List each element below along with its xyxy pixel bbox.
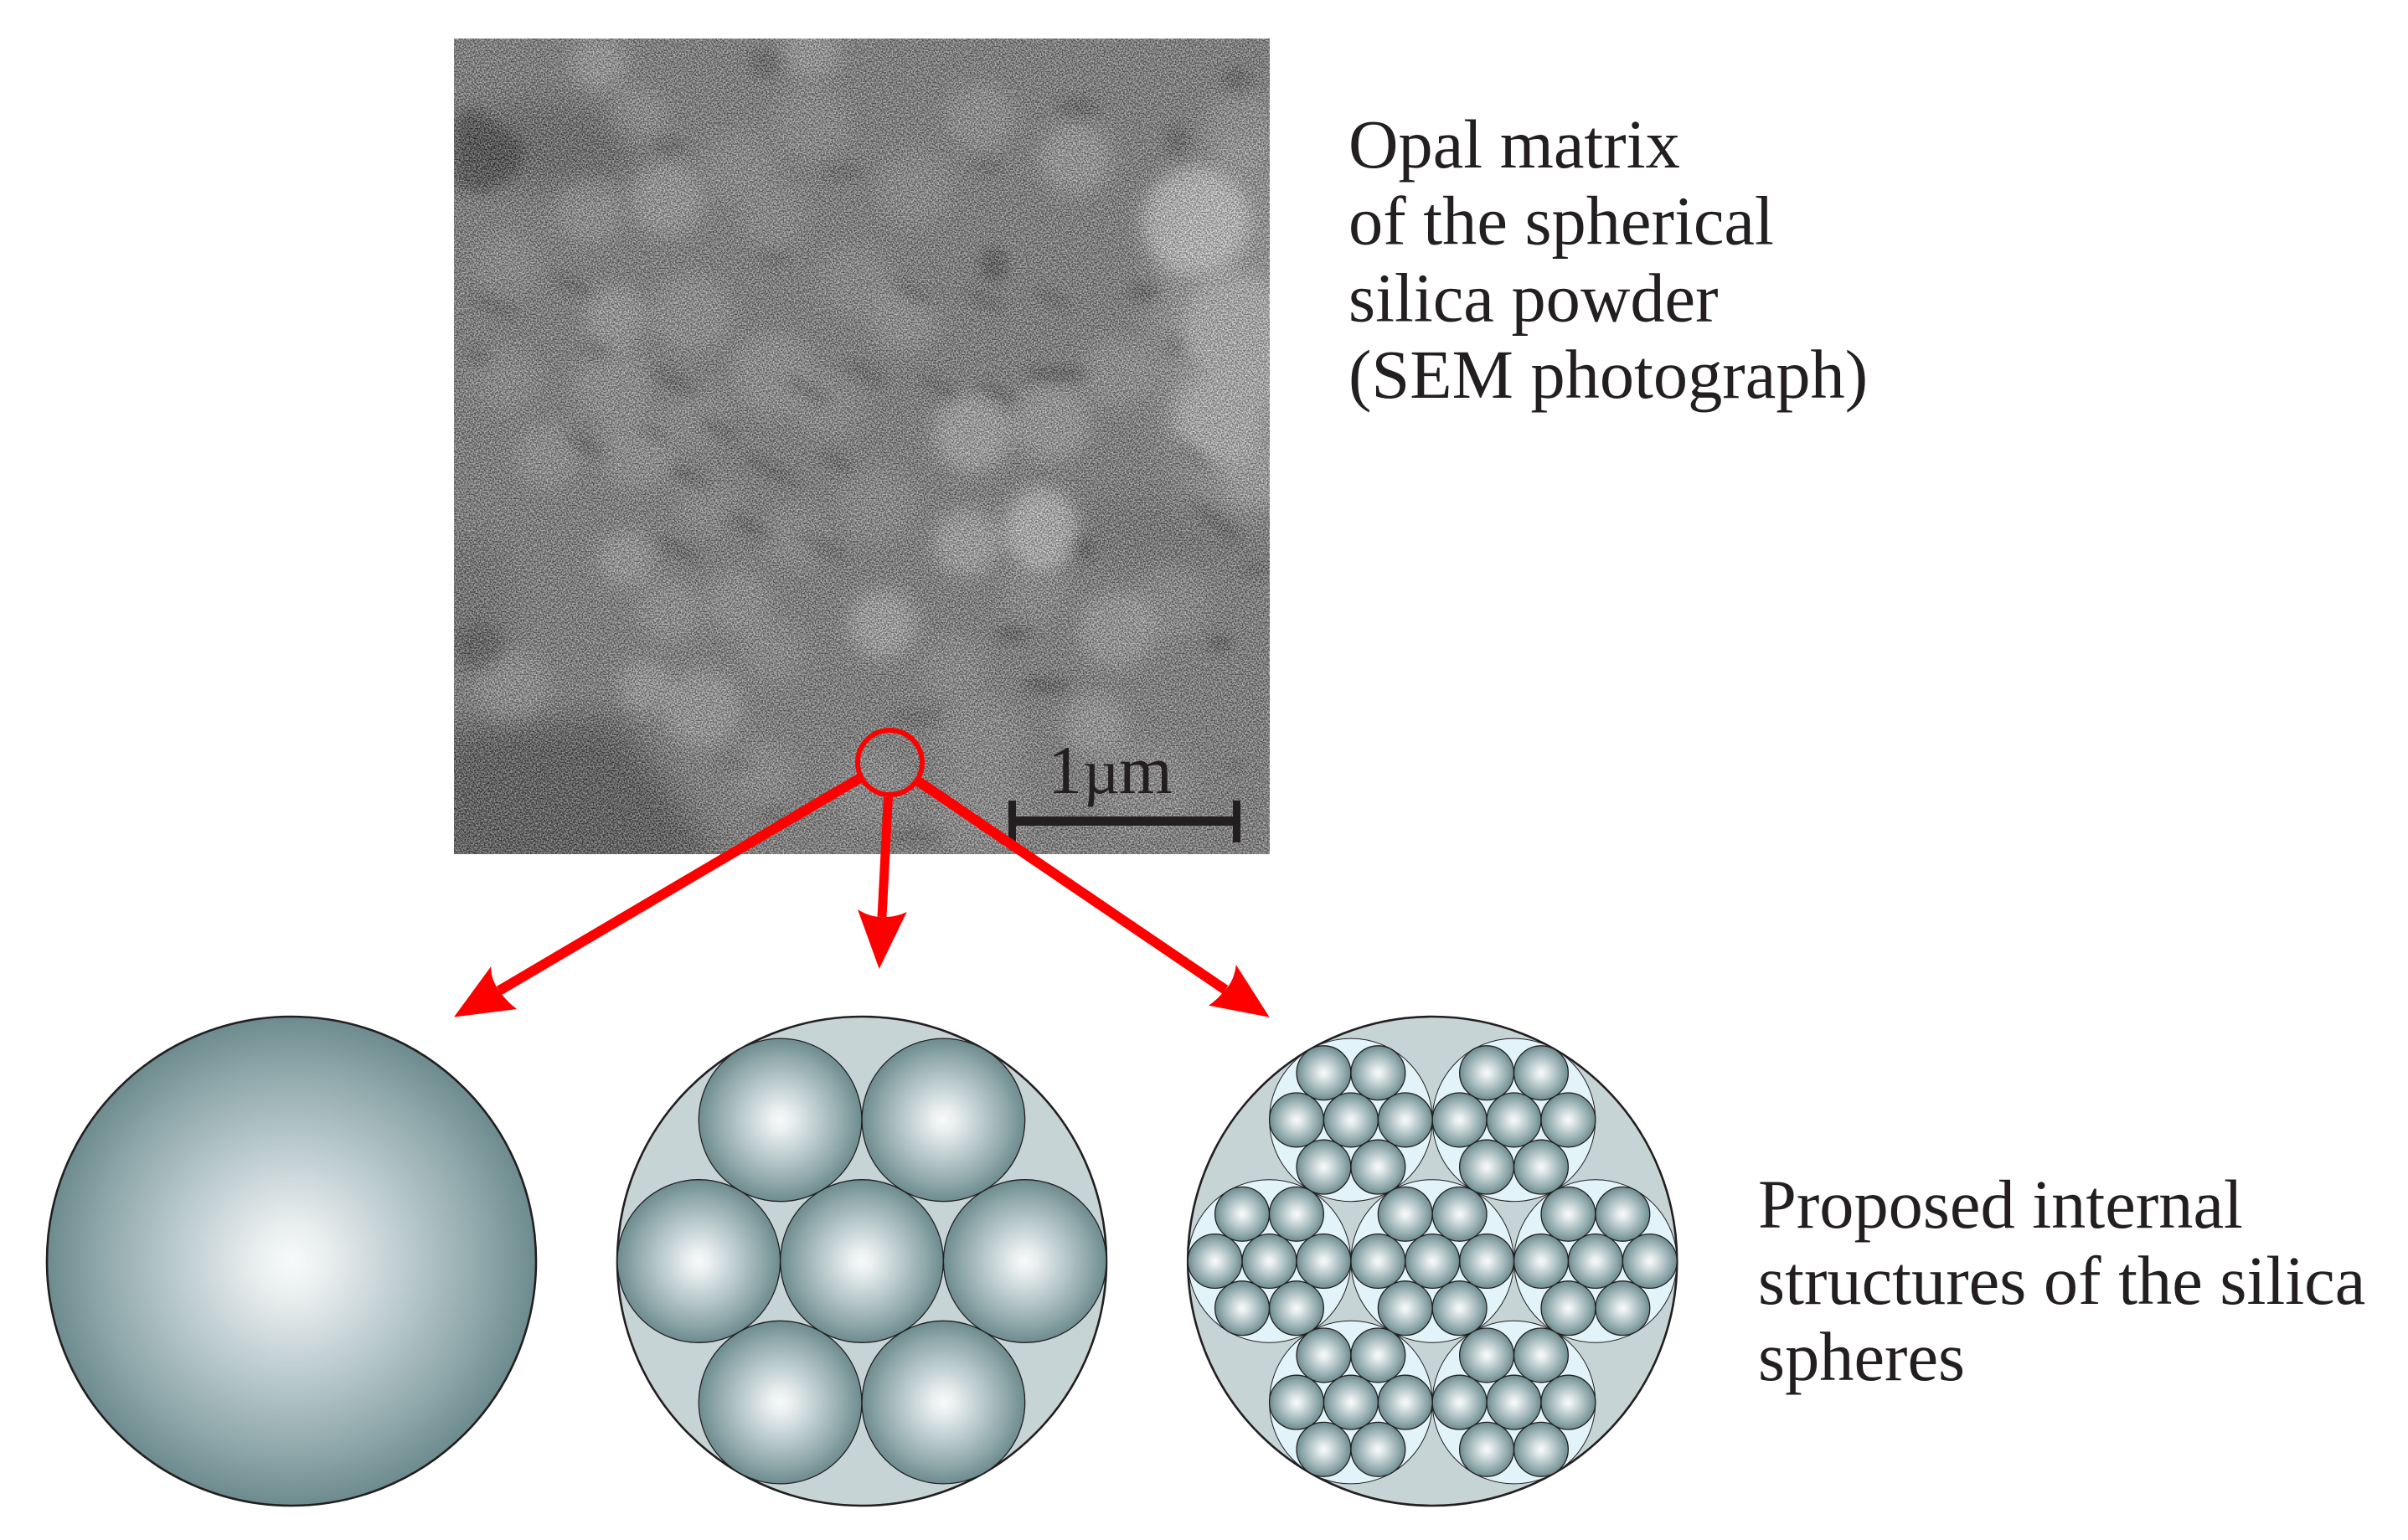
arrow: to seven-sphere structure bbox=[858, 797, 907, 969]
caption: SEM photograph: silica powder bbox=[1348, 260, 1719, 336]
caption: proposed structures: structures of the silica bbox=[1758, 1243, 2365, 1319]
scale bar with 1 µm label: µ bbox=[1083, 737, 1120, 807]
arrow: to solid sphere bbox=[454, 778, 860, 1017]
structure 1: solid sphere bbox=[47, 1017, 536, 1506]
arrow: to hierarchical structure bbox=[917, 780, 1270, 1017]
caption: SEM photograph bbox=[1348, 106, 1868, 413]
caption: proposed structures bbox=[1758, 1167, 2365, 1395]
panel: SEM photograph bbox=[398, 19, 1334, 875]
caption: proposed structures: Proposed internal bbox=[1758, 1167, 2243, 1243]
red selection circle on photograph bbox=[858, 730, 922, 795]
scale bar with 1 µm label: m bbox=[1119, 732, 1173, 808]
structure 3: seven clusters of seven small spheres bbox=[1188, 1017, 1677, 1506]
caption: SEM photograph: Opal matrix bbox=[1348, 106, 1680, 183]
caption: SEM photograph: (SEM photograph) bbox=[1348, 337, 1868, 413]
scale bar with 1 µm label: 1 bbox=[1048, 732, 1082, 808]
caption: SEM photograph: of the spherical bbox=[1348, 183, 1774, 260]
scale bar with 1 µm label bbox=[1008, 732, 1240, 842]
caption: proposed structures: spheres bbox=[1758, 1319, 1965, 1395]
structure 2: seven packed spheres bbox=[617, 1017, 1106, 1506]
